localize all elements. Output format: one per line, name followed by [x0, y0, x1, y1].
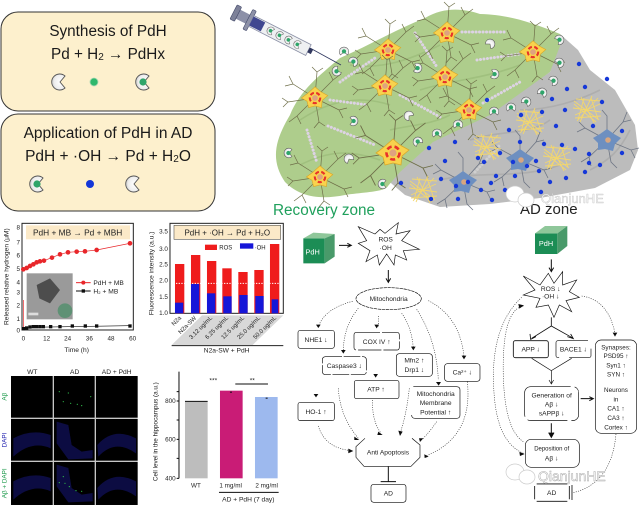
equation: synthesis: 2 — [98, 52, 104, 63]
box: HO-1 — [298, 402, 334, 421]
box: APP: APP ↓ — [521, 346, 540, 353]
significance marks: ** — [250, 378, 255, 385]
y ticks: 400 — [165, 475, 176, 482]
box: synapses and neurons: in — [614, 396, 619, 403]
box: APP — [513, 341, 548, 358]
bar chart: fluorescence intensity: 25.0 ug/mL — [237, 315, 263, 341]
bar chart: fluorescence intensity: N2a-SW + PdH — [204, 348, 250, 355]
box: generation of Abeta: Aβ ↓ — [545, 402, 558, 409]
y ticks: 1 — [16, 316, 20, 323]
y ticks: 3.5 — [159, 228, 168, 235]
blue nuclei bands — [13, 422, 136, 502]
significance marks — [209, 378, 255, 385]
x ticks: 24 — [64, 336, 72, 343]
box: ATP: ATP ↑ — [367, 386, 385, 393]
amyloid plaques — [409, 96, 601, 203]
mitochondria ellipse — [356, 288, 421, 310]
TEM inset — [27, 273, 73, 319]
ROS burst: ROS ↓ — [541, 286, 560, 293]
box: synapses and neurons — [595, 340, 637, 433]
y ticks: 2 — [16, 303, 20, 310]
box: synapses and neurons: Neurons — [604, 387, 628, 394]
significance marks: *** — [209, 378, 218, 385]
equation: application: O — [179, 148, 191, 165]
blue OH bars — [175, 284, 278, 313]
arrow: cube to ROS — [549, 259, 554, 272]
legend — [205, 243, 266, 251]
threshold dotted line — [171, 282, 283, 285]
box: synapses and neurons: PSD95 ↑ — [603, 353, 628, 360]
y ticks: 1.0 — [159, 310, 168, 317]
bar chart: fluorescence intensity: N2a-SW — [178, 315, 198, 336]
category labels band — [172, 315, 283, 345]
ROS burst: ·OH — [380, 245, 392, 252]
healthy neurons — [282, 2, 565, 207]
category labels: WT — [191, 482, 201, 489]
syringe needle — [310, 48, 341, 65]
octagon: anti apoptosis: Anti Apoptosis — [367, 450, 410, 457]
y ticks — [165, 398, 176, 482]
watermark top — [506, 186, 604, 207]
box: COX IV — [354, 332, 399, 350]
brain illustration — [229, 2, 639, 210]
panel: synthesis of PdH — [1, 12, 215, 111]
panel: application of PdH — [1, 114, 215, 211]
box: AD with inhibition bars: AD — [547, 490, 556, 497]
label: recovery zone: Recovery zone — [273, 202, 375, 219]
flowchart: AD zone — [493, 226, 637, 501]
brain: recovery green region — [276, 10, 563, 197]
box: mitochondria membrane potential: Membrane — [420, 400, 452, 407]
box: BACE1: BACE1 ↓ — [560, 346, 587, 353]
column headers: AD — [70, 369, 79, 376]
legend: ROS — [219, 245, 232, 251]
PdH cube: PdH — [539, 239, 553, 248]
arrow: ROS to mitochondria — [386, 270, 391, 282]
merge arrows — [532, 358, 572, 384]
watermark bottom — [506, 464, 606, 484]
category labels: 1 mg/ml — [219, 482, 242, 489]
bar chart: fluorescence intensity: N2a — [171, 315, 184, 328]
inhibition bar — [381, 467, 396, 482]
y axis label: Fluorescence intensity (a.u.) — [148, 232, 155, 315]
y axis label: Released relative hydrogen (μM) — [4, 228, 11, 325]
box: Mfn2 Drp1 — [396, 354, 432, 376]
box: AD with inhibition bars — [535, 484, 572, 501]
y ticks: 800 — [165, 398, 176, 405]
equation: synthesis: Pd + H — [51, 46, 98, 63]
box: NHE1 — [298, 330, 334, 348]
ROS burst: ROS — [378, 237, 393, 244]
PdH cube: PdH — [306, 247, 320, 256]
watermark bottom: QianjunHE — [538, 468, 606, 484]
arrow heads — [314, 325, 466, 458]
equation: application: PdH + ·OH → Pd + H — [25, 148, 173, 165]
y ticks — [16, 224, 20, 335]
equation: application: 2 — [173, 154, 179, 165]
group label: AD + PdH (7 day) — [222, 497, 274, 504]
icon: hydroxyl dot — [86, 180, 94, 188]
heading: synthesis: Synthesis of PdH — [49, 23, 167, 40]
row labels: Aβ + DAPI — [2, 468, 9, 498]
AD neurons — [433, 110, 639, 210]
x ticks: 60 — [129, 336, 137, 343]
label: AD zone: AD zone — [520, 201, 578, 218]
y ticks — [159, 228, 168, 317]
axons — [307, 32, 520, 172]
black series H2 + MB — [22, 325, 131, 330]
syringe barrel — [229, 2, 317, 62]
box: NHE1: NHE1 ↓ — [305, 337, 327, 344]
arrow: to synapses — [581, 397, 593, 401]
hydroxyl radicals — [399, 62, 624, 202]
chart legend: PdH + MB — [93, 280, 124, 287]
bar chart: fluorescence intensity: 3.12 ug/mL — [189, 315, 215, 341]
box: synapses and neurons: Cortex ↑ — [604, 424, 628, 431]
equation: synthesis: → PdHx — [104, 46, 165, 63]
line chart: released hydrogen: PdH + MB → Pd + MBH — [33, 227, 122, 237]
box: Ca2+ — [445, 364, 480, 381]
dashed arrows — [493, 296, 616, 493]
box: mitochondria membrane potential: Potential ↑ — [420, 409, 451, 416]
x axis label: Time (h) — [64, 347, 89, 354]
red ROS bars — [175, 244, 279, 313]
y ticks: 2.0 — [159, 278, 168, 285]
split arrows — [530, 317, 573, 339]
box: COX IV: COX IV ↑ — [363, 339, 391, 346]
y ticks: 1.5 — [159, 294, 168, 301]
y ticks: 2.5 — [159, 262, 168, 269]
arrow: cube to ROS — [339, 243, 351, 247]
mitochondria ellipse: Mitochondria — [370, 296, 408, 303]
box: generation of Abeta — [525, 387, 579, 421]
chart title band — [174, 225, 281, 239]
PdH cube — [303, 233, 335, 263]
bar chart: cell level in hippocampus — [153, 372, 279, 504]
box: Mfn2 Drp1: Drp1 ↓ — [405, 367, 424, 374]
y ticks: 6 — [16, 253, 20, 260]
fluorescence micrographs — [2, 369, 138, 505]
icon: hydrogen dot — [90, 78, 98, 86]
icon: PdH pacman — [30, 176, 43, 192]
y ticks: 8 — [16, 224, 20, 231]
icon: Pd pacman — [52, 74, 65, 90]
box: AD — [371, 484, 406, 502]
bar chart: fluorescence intensity: 12.5 ug/mL — [221, 315, 247, 341]
box: synapses and neurons: CA3 ↑ — [607, 415, 625, 422]
bar chart: fluorescence intensity: 50.0 ug/mL — [253, 315, 279, 341]
box: synapses and neurons: Syn1 ↑ — [606, 362, 626, 369]
chart legend: H₂ + MB — [93, 288, 119, 295]
column headers: AD + PdH — [102, 369, 132, 376]
icon: Pd pacman — [126, 176, 139, 192]
chart frame — [170, 223, 283, 313]
x ticks: 36 — [86, 336, 93, 343]
row labels — [2, 392, 9, 498]
watermark top: QianjunHE — [541, 191, 604, 206]
legend: ·OH — [255, 245, 266, 251]
box: AD: AD — [384, 490, 393, 497]
x ticks: 0 — [22, 336, 26, 343]
bars — [185, 401, 208, 478]
flowchart: recovery zone — [298, 223, 480, 502]
box: mitochondria membrane potential: Mitochondria — [417, 391, 455, 398]
icon: PdH pacman — [136, 74, 149, 90]
box: synapses and neurons: SYN ↑ — [607, 372, 625, 379]
x ticks: 48 — [107, 336, 115, 343]
arrow: generation to deposition — [549, 423, 554, 437]
box: BACE1 — [556, 341, 591, 358]
ROS burst — [523, 272, 579, 317]
bar chart: fluorescence intensity — [148, 223, 283, 355]
PdH cube — [535, 226, 567, 254]
y ticks: 3.0 — [159, 246, 168, 253]
box: Caspase3: Caspase3 ↓ — [327, 363, 362, 370]
box: synapses and neurons: CA1 ↑ — [607, 406, 625, 413]
box: mitochondria membrane potential — [412, 387, 460, 418]
category labels — [191, 482, 278, 489]
box: Mfn2 Drp1: Mfn2 ↑ — [404, 358, 424, 365]
y ticks: 3 — [16, 289, 20, 296]
red series PdH + MB — [21, 241, 132, 330]
box: Caspase3 — [322, 357, 366, 375]
ROS burst: ·OH ↓ — [542, 294, 559, 301]
dashed arrows — [318, 301, 468, 456]
heading: application: Application of PdH in AD — [24, 125, 192, 142]
column headers — [27, 369, 132, 376]
box: deposition: Aβ ↓ — [545, 456, 558, 463]
y ticks: 7 — [16, 239, 20, 246]
category labels: 2 mg/ml — [255, 482, 278, 489]
row labels: Aβ — [2, 392, 9, 401]
box: ATP — [354, 380, 399, 399]
green amyloid dots — [59, 391, 91, 492]
syringe — [229, 2, 341, 65]
chart legend — [76, 280, 124, 295]
octagon: anti apoptosis — [356, 438, 420, 466]
box: generation of Abeta: sAPPβ ↓ — [539, 411, 564, 418]
chart title band — [26, 225, 130, 239]
row labels: DAPI — [2, 432, 9, 447]
x ticks: 12 — [43, 336, 51, 343]
y ticks: 600 — [165, 436, 176, 443]
y ticks: 4 — [16, 279, 20, 286]
column headers: WT — [27, 369, 38, 376]
box: generation of Abeta: Generation of — [531, 392, 572, 399]
group label — [172, 344, 283, 347]
brain: AD gray region — [385, 34, 638, 207]
bar chart: fluorescence intensity: PdH + ·OH → Pd + H₂O — [184, 228, 270, 237]
arrow heads — [518, 304, 617, 456]
bar chart: fluorescence intensity: 6.25 ug/mL — [205, 315, 231, 341]
image grid — [11, 376, 138, 505]
y axis — [177, 372, 179, 478]
line chart: released hydrogen — [4, 223, 137, 354]
y ticks: 5 — [16, 266, 20, 273]
box: synapses and neurons: Synapses: — [601, 344, 631, 351]
y axis label: Cell level in the hippocampus (a.u.) — [153, 382, 160, 481]
box: deposition: Deposition of — [534, 447, 569, 453]
box: Ca2+: Ca²⁺ ↓ — [453, 370, 472, 377]
PdH particles — [284, 33, 566, 189]
ROS burst — [358, 223, 419, 265]
box: HO-1: HO-1 ↑ — [305, 409, 327, 416]
x ticks — [22, 336, 137, 343]
box: deposition — [525, 439, 579, 467]
y ticks: 0 — [16, 328, 20, 335]
chart frame — [22, 223, 133, 330]
